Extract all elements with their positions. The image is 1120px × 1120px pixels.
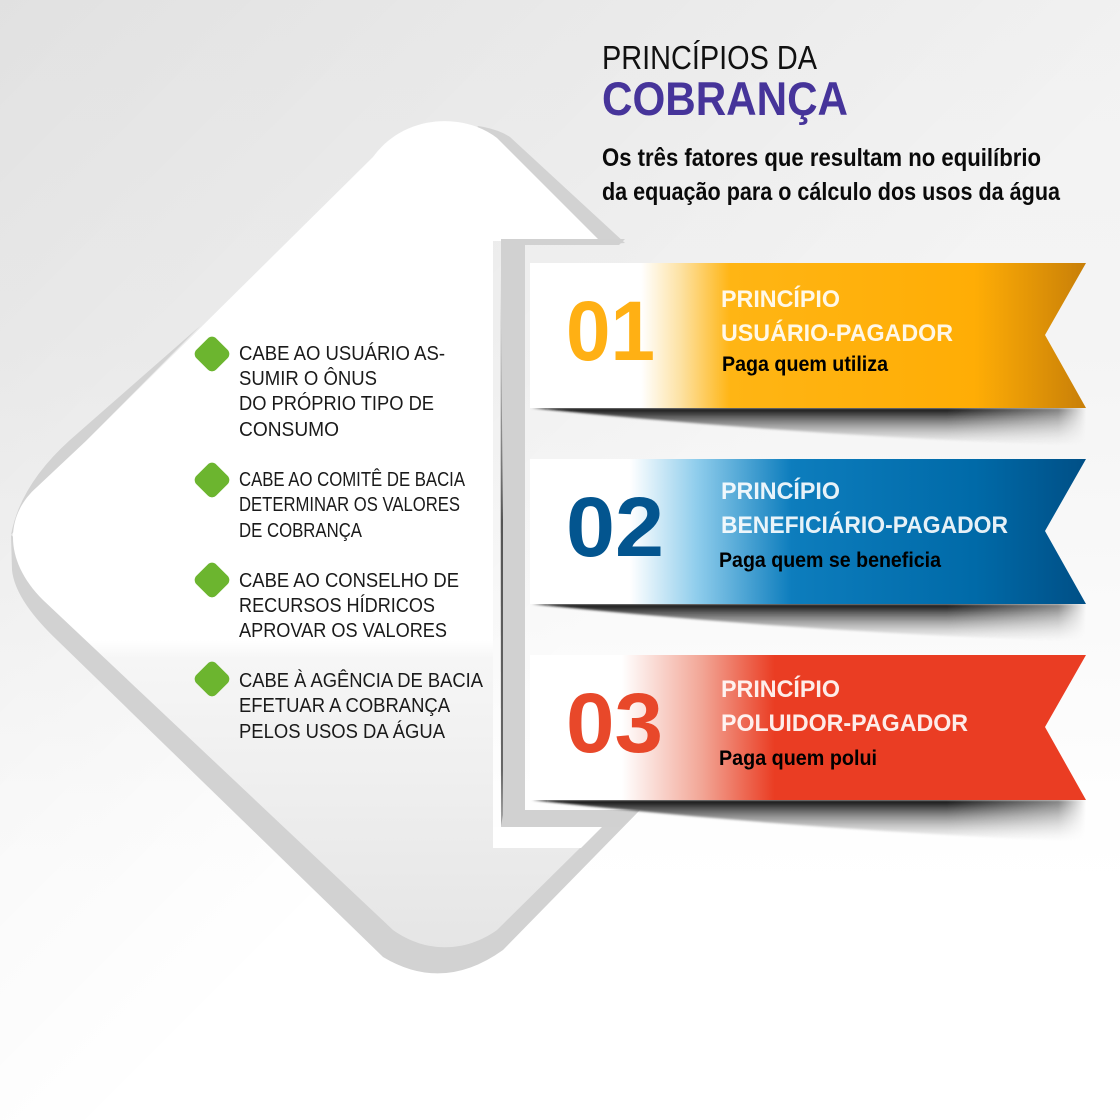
ribbon 03: poluidor-pagador: Paga quem polui <box>719 747 877 770</box>
ribbon 03: poluidor-pagador <box>530 655 1090 842</box>
ribbon 03: poluidor-pagador: POLUIDOR-PAGADOR <box>721 710 968 737</box>
ribbon 02: beneficiário-pagador: Paga quem se beneficia <box>719 549 941 572</box>
bullet 1: DO PRÓPRIO TIPO DE <box>239 392 434 415</box>
panel: diamond with responsibilities <box>11 121 640 973</box>
ribbon 01: usuário-pagador: USUÁRIO-PAGADOR <box>721 319 953 347</box>
bullet 4 <box>192 659 484 743</box>
ribbon 01: usuário-pagador <box>530 263 1090 446</box>
bullet 4: EFETUAR A COBRANÇA <box>239 695 451 717</box>
ribbon 03: poluidor-pagador: 03 <box>566 676 663 770</box>
diamond face <box>13 121 600 947</box>
bullet 2: DETERMINAR OS VALORES <box>239 494 460 516</box>
ribbon 02: beneficiário-pagador: 02 <box>566 480 664 574</box>
bullet 3 <box>192 560 459 642</box>
ribbon 01: usuário-pagador: PRINCÍPIO <box>721 285 840 313</box>
bullet list <box>192 334 484 743</box>
ribbon 03: poluidor-pagador: PRINCÍPIO <box>721 675 840 703</box>
subtitle: da equação para o cálculo dos usos da água <box>602 178 1061 206</box>
subtitle: Os três fatores que resultam no equilíbrio <box>602 144 1041 172</box>
ribbon 02: beneficiário-pagador: PRINCÍPIO <box>721 477 840 505</box>
bullet 3: APROVAR OS VALORES <box>239 620 447 642</box>
ribbon 02: beneficiário-pagador <box>530 459 1090 642</box>
subtitle <box>602 144 1061 206</box>
title: PRINCÍPIOS DA <box>602 39 817 76</box>
bullet 2 <box>192 460 466 542</box>
bullet 2: DE COBRANÇA <box>239 520 363 542</box>
diamond shadow <box>11 126 640 973</box>
bullet 1 <box>192 334 445 441</box>
bullet 4: CABE À AGÊNCIA DE BACIA <box>239 669 484 692</box>
white corner strip <box>493 827 602 848</box>
bullet 2: CABE AO COMITÊ DE BACIA <box>239 468 466 491</box>
bullet 3: CABE AO CONSELHO DE <box>239 570 459 592</box>
ribbon 02: beneficiário-pagador: BENEFICIÁRIO-PAGADOR <box>721 511 1008 539</box>
bullet 1: CABE AO USUÁRIO AS- <box>239 342 445 365</box>
ribbon 01: usuário-pagador: 01 <box>566 284 655 378</box>
bullet 1: SUMIR O ÔNUS <box>239 367 377 390</box>
title: COBRANÇA <box>602 72 848 125</box>
ribbon 01: usuário-pagador: Paga quem utiliza <box>722 353 888 376</box>
bullet 4: PELOS USOS DA ÁGUA <box>239 720 446 743</box>
bracket <box>500 239 638 827</box>
bullet 3: RECURSOS HÍDRICOS <box>239 594 435 617</box>
bullet 1: CONSUMO <box>239 419 339 441</box>
title <box>602 39 848 125</box>
